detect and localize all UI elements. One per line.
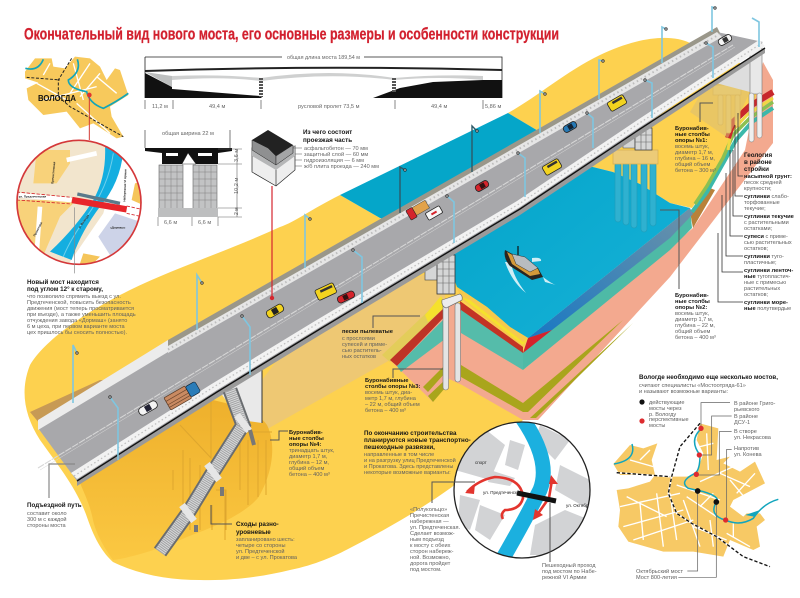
text: bridge variants: В районе Григо- [734, 400, 775, 407]
text: stairs: четыре со стороны [236, 543, 285, 549]
text: new bridge angle: движения (мост теперь просматривается [27, 306, 134, 312]
text: new junctions: По окончанию строительства [364, 430, 457, 437]
text: new bridge angle: 6 м цеха, при первом варианте моста [27, 324, 126, 330]
text: bridge variants [636, 400, 775, 581]
location marker [87, 93, 92, 140]
panel: river far side [340, 113, 545, 230]
text: geology: ные полутвердые [744, 306, 791, 312]
text: half-ring: сторон набереж- [410, 549, 454, 555]
text: bridge variants: ДСУ-1 [734, 420, 750, 426]
text: piles No.4: глубина – 12 м, [289, 460, 329, 466]
text: piles No.4: общий объем [289, 465, 324, 472]
text: stairs: Сходы разно- [236, 521, 279, 528]
near lamp posts [109, 18, 759, 460]
label: Вологда: ВОЛОГДА [38, 94, 76, 103]
text: half-ring: набережная — [410, 519, 449, 525]
text: geology: текучие; [744, 206, 766, 212]
text: new junctions: некоторые возможные варианты: [364, 470, 451, 476]
text: bridge variants: Октябрьский мост [636, 568, 683, 575]
circle map: junctions: ул. Октябрьская [566, 503, 601, 508]
panel: bridge deck [38, 27, 765, 486]
text: half-ring: «Полукольцо» [410, 507, 447, 513]
text: geology: суглинки ленточ- [744, 268, 793, 274]
text: piles No.3: Буронабивные [365, 377, 409, 384]
panel: near pier with stone column [425, 255, 462, 390]
text: geology: пластичные; [744, 260, 777, 266]
text: new bridge angle: при въезде), а также уменьшить площадь [27, 312, 136, 318]
text: geology: крупности; [744, 186, 772, 192]
text: piles No.3: метр 1,7 м, глубина [365, 396, 417, 402]
elevation diagram: 49,4 м [431, 104, 447, 110]
text: half-ring: ной. Возможно, [410, 554, 451, 561]
text: piles No.2 [660, 210, 716, 341]
text: roadway layers [293, 129, 379, 170]
text: half-ring: Сделает возмож- [410, 531, 455, 537]
text: new bridge angle: цех пришлось бы сносить полностью). [27, 330, 127, 336]
text: half-ring: ул. Предтеченская. [410, 525, 460, 531]
text: new junctions: и на разгрузку улиц Предтеченской [364, 457, 456, 464]
legend: мосты через [649, 406, 682, 412]
text: access road: Подъездной путь [27, 502, 82, 509]
cross-section diagram: 2 м [234, 207, 240, 215]
text: new bridge angle: Новый мост находится [27, 279, 99, 286]
far lamp posts [73, 7, 716, 403]
circle map: bridge location: ул. Предтеченская [19, 194, 46, 198]
text: access road: 300 м с каждой [27, 516, 67, 523]
text: silty sands: с прослоями [342, 336, 375, 342]
vehicles [137, 33, 733, 416]
cross-section diagram: общая ширина 22 м [162, 131, 214, 137]
title: Окончательный вид нового моста, его основные размеры и особенности конструкции [24, 26, 559, 44]
text: new junctions: пешеходные развязки, [364, 444, 435, 451]
text: more bridges heading [639, 374, 778, 395]
legend: р. Вологду [649, 412, 676, 418]
text: pedestrian passage: Пешеходный проход [542, 562, 596, 569]
text: half-ring: Пречистенская [410, 513, 449, 519]
text: stairs: уровневые [236, 529, 271, 536]
panel: geology cut [382, 62, 773, 420]
text: piles No.4: тринадцать штук, [289, 448, 335, 454]
cross-section diagram: 6,6 м [198, 220, 211, 226]
text: roadway layers: гидроизоляция — 6 мм [304, 158, 364, 164]
text: geology: стройки [744, 166, 769, 173]
text: roadway layers: ж/б плита проезда — 240 мм [304, 164, 379, 170]
text: bridge variants: ул. Конева [734, 452, 763, 458]
text: bridge variants: рьевского [734, 407, 760, 413]
city location map [25, 57, 128, 140]
text: geology: торфованные [744, 200, 780, 206]
text: piles No.3: восемь штук, диа- [365, 390, 412, 396]
city bridges map [613, 403, 778, 577]
text: bridge variants: ул. Некрасова [734, 435, 772, 441]
text: geology: ные с примесью [744, 280, 786, 286]
text: silty sands: ных остатков [342, 354, 376, 360]
circle map: junctions: спорт [475, 460, 487, 465]
text: roadway layers: асфальтобетон — 70 мм [304, 146, 368, 152]
text: geology: с растительными [744, 220, 789, 226]
text: piles No.4: опоры №4: [289, 442, 321, 448]
text: silty sands: пески пылеватые [342, 329, 394, 335]
text: geology: суглинки слабо- [744, 194, 789, 200]
panel: river [440, 130, 690, 338]
text: stairs: запланировано шесть: [236, 537, 295, 543]
text: bridge variants: В створе [734, 429, 757, 435]
text: new bridge angle: что позволило спрямить выезд с ул. [27, 294, 121, 300]
text: piles No.1: бетона – 300 м³ [675, 168, 716, 174]
text: new bridge angle: Предтеченской, повысить безопасность [27, 299, 131, 306]
text: piles No.3: – 22 м, общий объем [365, 401, 420, 408]
text: more bridges heading: считают специалисты «Мостоотряда-61» [639, 383, 746, 389]
cross-section diagram: 10,2 м [234, 178, 240, 194]
text: geology: ные тугопластич- [744, 274, 790, 280]
text: piles No.1: ные столбы [675, 131, 710, 138]
text: access road [27, 464, 82, 529]
text: new bridge angle: отчуждения завода «Дормаш» (занято [27, 318, 127, 324]
circle map: bridge location: Набережная VI Армии [122, 169, 127, 202]
text: geology: суглинки текучие [744, 214, 795, 220]
text: pedestrian passage: под мостом по Набе- [542, 569, 597, 575]
circle map: bridge location: «Дормаш» [110, 226, 126, 230]
text: piles No.4: диаметр 1,7 м, [289, 454, 328, 460]
text: geology: остатков; [744, 292, 769, 298]
text: half-ring [410, 482, 475, 573]
text: piles No.2: восемь штук, [675, 311, 710, 317]
panel: right bank foundations [713, 85, 741, 133]
roadway layers block [252, 130, 295, 186]
text: piles No.4 [270, 429, 335, 478]
text: half-ring: ным подъезд [410, 537, 445, 543]
cross-section diagram: 3,6 м [234, 149, 240, 162]
text: piles No.1: диаметр 1,7 м, [675, 150, 714, 156]
panel: terrain, left bank [25, 195, 528, 580]
text: roadway layers: Из чего состоит [303, 129, 352, 136]
legend: действующие [649, 399, 685, 406]
text: geology: остатками; [744, 226, 773, 232]
text: geology: суглинки море- [744, 300, 788, 306]
circle map: bridge location: р. Вологда [78, 213, 90, 229]
text: access road: стороны моста [27, 523, 67, 529]
text: piles No.2: общий объем [675, 328, 710, 335]
text: more bridges heading: Вологде необходимо еще несколько мостов, [639, 374, 778, 381]
cross-section diagram [145, 130, 242, 226]
text: geology: растительных [744, 286, 780, 292]
text: silty sands: сью раститель- [342, 348, 382, 354]
text: piles No.4: Буронабив- [289, 429, 323, 436]
panel: river pier foundations [613, 150, 658, 232]
text: piles No.1: Буронабив- [675, 125, 709, 132]
text: piles No.2: ные столбы [675, 298, 710, 305]
circle map: bridge location: Пречистенская [50, 161, 56, 184]
text: new junctions: планируются новые транспортно- [364, 437, 471, 444]
legend: перспективные [649, 417, 689, 423]
text: access road: составит около [27, 511, 67, 517]
elevation diagram: 49,4 м [209, 104, 225, 110]
stairs [160, 390, 254, 552]
legend [639, 399, 689, 429]
elevation diagram [145, 55, 502, 110]
icon: ship [505, 246, 556, 293]
circle map: bridge location: Прокатова [32, 221, 43, 237]
text: piles No.3: бетона – 400 м³ [365, 408, 406, 414]
text: geology [718, 113, 795, 312]
text: bridge variants: Напротив [734, 446, 759, 452]
text: piles No.1: восемь штук, [675, 144, 710, 150]
text: piles No.3 [365, 369, 443, 414]
text: silty sands [342, 316, 420, 360]
text: piles No.2: опоры №2: [675, 305, 707, 311]
text: piles No.2: бетона – 400 м³ [675, 335, 716, 341]
text: geology: супеси с приме- [744, 234, 788, 240]
circle map: bridge location [13, 137, 147, 273]
text: piles No.3: столбы опоры №3: [365, 383, 421, 390]
text: geology: песок средней [744, 179, 782, 186]
panel: right abutment [623, 48, 762, 150]
panel: terrain, far bank [508, 38, 773, 208]
text: piles No.1: глубина – 16 м, [675, 156, 715, 162]
text: new junctions: направленные в том числе [364, 452, 434, 458]
text: piles No.4: бетона – 400 м³ [289, 472, 330, 478]
text: geology: остатков; [744, 246, 769, 252]
elevation diagram: 11,2 м [152, 104, 168, 110]
text: bridge variants: В районе [734, 413, 758, 420]
text: geology: сью растительных [744, 240, 792, 246]
circle map: junctions [453, 421, 591, 559]
text: half-ring: к мосту с обеих [410, 543, 451, 549]
text: piles No.2: глубина – 22 м, [675, 323, 715, 329]
text: pedestrian passage: режной VI Армии [542, 574, 587, 581]
text: bridge variants: Мост 800-летия [636, 575, 677, 581]
circle map: junctions: ул. Предтеченская [483, 490, 523, 495]
text: piles No.2: диаметр 1,7 м, [675, 317, 714, 323]
text: new junctions [364, 430, 471, 476]
text: new bridge angle: под углом 12° к старому, [27, 286, 103, 293]
text: stairs [211, 505, 298, 561]
text: new junctions: и Прокатова. Здесь представлены [364, 464, 453, 470]
text: new bridge angle [27, 279, 136, 336]
text: half-ring: дорога пройдет [410, 560, 451, 567]
panel: left abutment [220, 362, 262, 423]
text: geology: Геология [744, 152, 773, 159]
text: piles No.1: опоры №1: [675, 138, 707, 144]
text: piles No.4: ные столбы [289, 435, 324, 442]
elevation diagram: русловой пролет 73,5 м [298, 103, 360, 110]
text: geology: в районе [744, 159, 772, 166]
elevation diagram: 5,86 м [485, 104, 501, 110]
text: half-ring: под мостом. [410, 567, 442, 573]
text: stairs: ул. Предтеченской [236, 548, 285, 555]
text: geology: насыпной грунт: [744, 173, 792, 180]
text: stairs: и две – с ул. Прокатова [236, 555, 298, 561]
text: roadway layers: защитный слой — 60 мм [304, 151, 368, 158]
text: piles No.1: общий объем [675, 161, 710, 168]
cross-section diagram: 6,6 м [164, 220, 177, 226]
text: pedestrian passage [542, 503, 597, 581]
text: silty sands: супесей и приме- [342, 341, 387, 348]
text: more bridges heading: и называют возможные варианты: [639, 389, 729, 395]
red line to roadway [270, 186, 274, 300]
elevation diagram: общая длина моста 189,54 м [287, 55, 360, 61]
text: piles No.2: Буронабив- [675, 292, 709, 299]
text: geology: суглинки туго- [744, 254, 784, 260]
text: roadway layers: проезжая часть [303, 137, 352, 144]
text: piles No.1 [675, 103, 716, 174]
legend: мосты [649, 423, 665, 429]
